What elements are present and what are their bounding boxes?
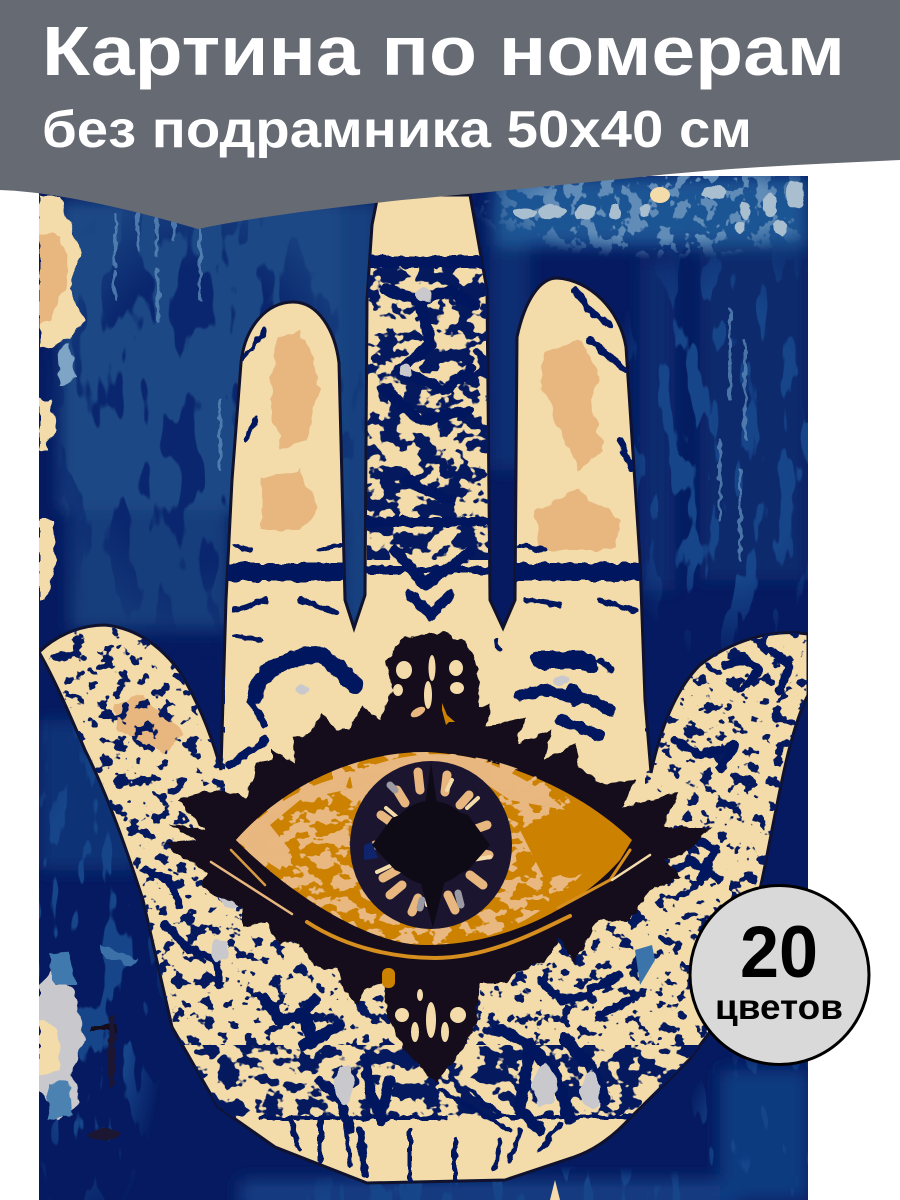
left lower palm bbox=[145, 870, 220, 985]
fingers bbox=[235, 545, 545, 550]
top knob spots bbox=[393, 655, 464, 725]
lash body bbox=[163, 632, 712, 1083]
pupil bbox=[372, 762, 490, 928]
finger bands bbox=[367, 256, 490, 268]
right thumb bbox=[675, 650, 790, 770]
bottom knob spots bbox=[395, 989, 466, 1042]
eye ornament bbox=[163, 632, 712, 1083]
header banner bbox=[0, 0, 900, 229]
iris rays bbox=[375, 772, 489, 912]
badge: 20 colours bbox=[690, 886, 869, 1064]
palm upper bbox=[255, 655, 355, 695]
almond light patches bbox=[236, 775, 350, 870]
hand silhouette bbox=[39, 195, 808, 1183]
tan patches on fingers bbox=[115, 330, 620, 755]
almond bbox=[236, 752, 632, 945]
noise texture on the hand bbox=[39, 265, 808, 1118]
badge label: цветов bbox=[715, 988, 843, 1027]
iris bbox=[350, 761, 512, 929]
painting: hamsa hand with eye bbox=[39, 176, 808, 1200]
palm band and drips bbox=[495, 1115, 635, 1119]
lower lid lines bbox=[211, 850, 650, 958]
hand texture: blue marks bbox=[145, 262, 790, 1185]
title: Картина по номерам bbox=[42, 12, 845, 90]
painting background bbox=[39, 176, 808, 1200]
top right pale speckles bbox=[513, 181, 805, 236]
almond mottling bbox=[236, 752, 590, 945]
subtitle: без подрамника 50х40 см bbox=[42, 101, 752, 159]
middle finger marks bbox=[385, 290, 475, 615]
badge number: 20 bbox=[740, 912, 818, 993]
lower left pale patches bbox=[39, 945, 140, 1139]
pale grey marks on the hand bbox=[210, 289, 600, 1110]
left edge cream strip bbox=[39, 195, 85, 600]
